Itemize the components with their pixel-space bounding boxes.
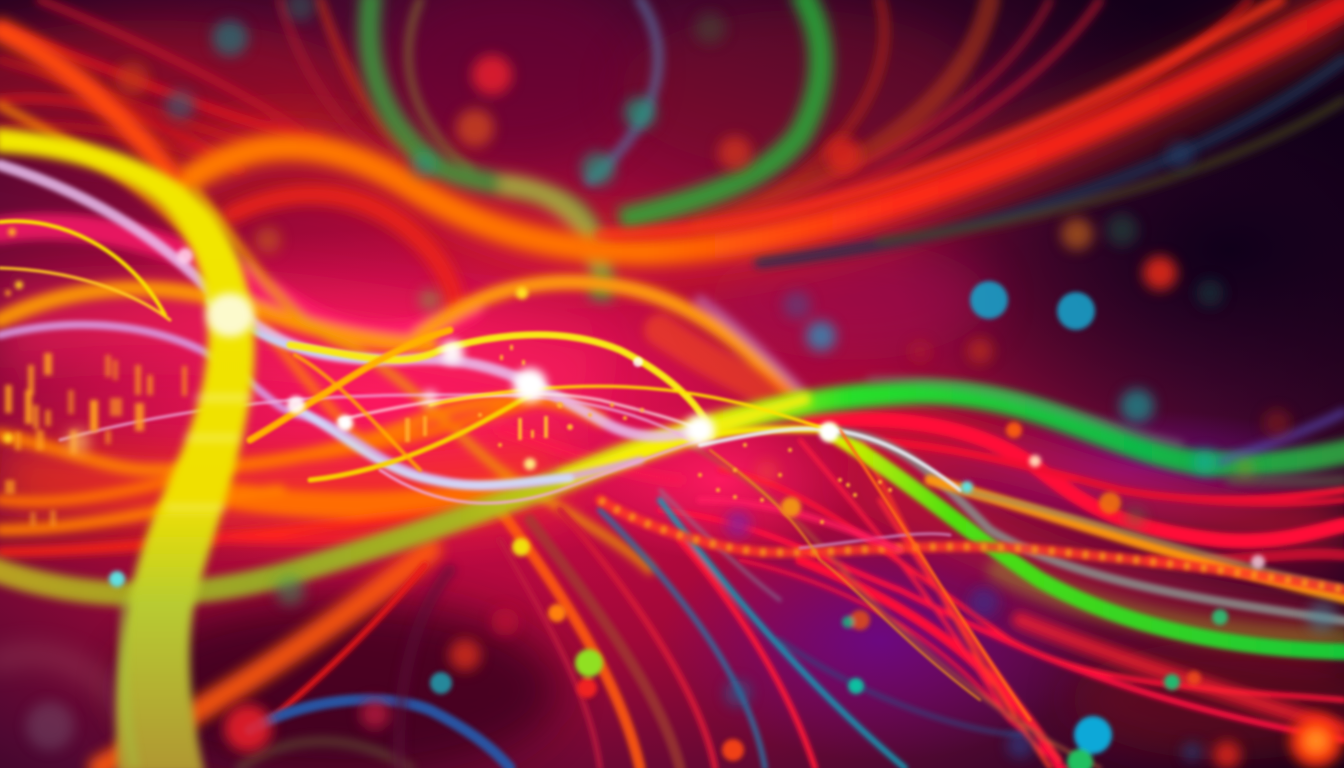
dotted orange line [600,500,1344,590]
lower green stream [830,432,1344,652]
white light nodes [177,248,1265,569]
top faint background swirl lines [0,0,1344,262]
pink and orange middle ribbons [0,190,800,570]
red flowing lines on the right [660,419,1344,768]
bokeh dots in focus [3,228,1228,768]
sparkles around the centre [405,345,892,524]
orange-red main band [0,0,1344,440]
thick yellow vertical ribbon [0,128,255,768]
white-lilac thread [0,165,960,503]
green loop at top [369,0,821,300]
fan of lines at bottom centre [500,490,1020,768]
bottom left rays and arcs [0,550,510,768]
yellow golden threads [0,221,1030,720]
glowing orange rain on the left [5,353,187,526]
green and yellow wave [0,380,1344,594]
white glows on ribbon crossing [165,293,255,511]
